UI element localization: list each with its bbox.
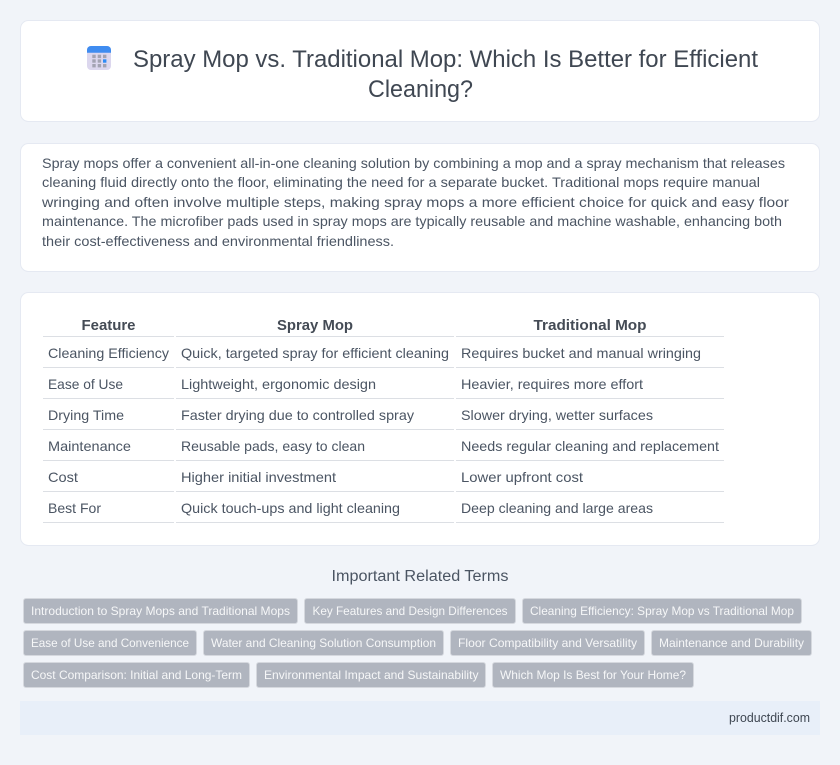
- tag: [24, 598, 298, 624]
- tag: [522, 598, 802, 624]
- row: cleaning efficiency: Requires bucket and manual wringing: [461, 345, 701, 361]
- icon: calendar: [87, 46, 111, 70]
- row: best for: Quick touch-ups and light cleaning: [181, 500, 400, 516]
- tag: [204, 630, 444, 656]
- tag: Environmental Impact and Sustainability: [264, 668, 478, 682]
- tag: Key Features and Design Differences: [312, 604, 508, 618]
- row: best for: Deep cleaning and large areas: [461, 500, 653, 516]
- intro paragraph: maintenance. The microfiber pads used in spray mops are typically reusable and machine washable, enhancing both: [42, 213, 782, 229]
- tag: [450, 630, 644, 656]
- row: cost: Cost: [48, 469, 78, 485]
- table header: [82, 317, 646, 334]
- intro paragraph: Spray mops offer a convenient all-in-one cleaning solution by combining a mop and a spray mechanism that releases: [42, 155, 785, 171]
- intro paragraph: cleaning fluid directly onto the floor, eliminating the need for a separate bucket. Traditional mops require manual: [42, 174, 760, 190]
- tag: [24, 662, 250, 688]
- row: cost: Higher initial investment: [181, 469, 336, 485]
- row: drying time: [48, 407, 653, 423]
- table header: Traditional Mop: [534, 317, 646, 334]
- row: maintenance: Needs regular cleaning and replacement: [461, 438, 719, 454]
- tag: [304, 598, 516, 624]
- tag: Which Mop Is Best for Your Home?: [500, 668, 686, 682]
- footer: [20, 701, 820, 735]
- title: Spray Mop vs. Traditional Mop: Which Is Better for Efficient: [133, 46, 758, 73]
- row: cleaning efficiency: [48, 345, 701, 361]
- table header: Feature: [82, 317, 136, 334]
- tag: [652, 630, 812, 656]
- row: cleaning efficiency: Cleaning Efficiency: [48, 345, 169, 361]
- table header: Spray Mop: [277, 317, 353, 334]
- row: ease of use: Lightweight, ergonomic design: [181, 376, 376, 392]
- tag: [256, 662, 486, 688]
- footer site name: productdif.com: [729, 711, 810, 725]
- tag: Cleaning Efficiency: Spray Mop vs Traditional Mop: [530, 604, 794, 618]
- tag: [492, 662, 694, 688]
- intro paragraph: wringing and often involve multiple steps, making spray mops a more efficient choice for quick and easy floor: [41, 194, 789, 210]
- row: cleaning efficiency: Quick, targeted spray for efficient cleaning: [181, 345, 449, 361]
- row: maintenance: Maintenance: [48, 438, 131, 454]
- tag: Cost Comparison: Initial and Long-Term: [31, 668, 242, 682]
- row: drying time: Slower drying, wetter surfaces: [461, 407, 653, 423]
- row: ease of use: [48, 376, 643, 392]
- row: cost: Lower upfront cost: [461, 469, 583, 485]
- heading: related terms: Important Related Terms: [332, 568, 509, 585]
- row: ease of use: Heavier, requires more effort: [461, 376, 643, 392]
- intro paragraph: their cost-effectiveness and environmental friendliness.: [42, 233, 394, 249]
- header panel: [20, 20, 820, 122]
- row: drying time: Faster drying due to controlled spray: [181, 407, 414, 423]
- panel: introduction text: [20, 144, 820, 272]
- tag group: related terms: [24, 598, 812, 688]
- title: Cleaning?: [368, 76, 473, 103]
- row: cost: [48, 469, 583, 485]
- tag: [24, 630, 196, 656]
- row: drying time: Drying Time: [48, 407, 124, 423]
- tag: Floor Compatibility and Versatility: [458, 636, 637, 650]
- tag: Ease of Use and Convenience: [31, 636, 189, 650]
- panel: comparison table: [20, 292, 820, 546]
- row: ease of use: Ease of Use: [48, 376, 123, 392]
- row: best for: [48, 500, 653, 516]
- row: best for: Best For: [48, 500, 101, 516]
- tag: Introduction to Spray Mops and Traditional Mops: [31, 604, 290, 618]
- row: maintenance: Reusable pads, easy to clean: [181, 438, 365, 454]
- row: maintenance: [48, 438, 719, 454]
- tag: Water and Cleaning Solution Consumption: [211, 636, 436, 650]
- tag: Maintenance and Durability: [659, 636, 804, 650]
